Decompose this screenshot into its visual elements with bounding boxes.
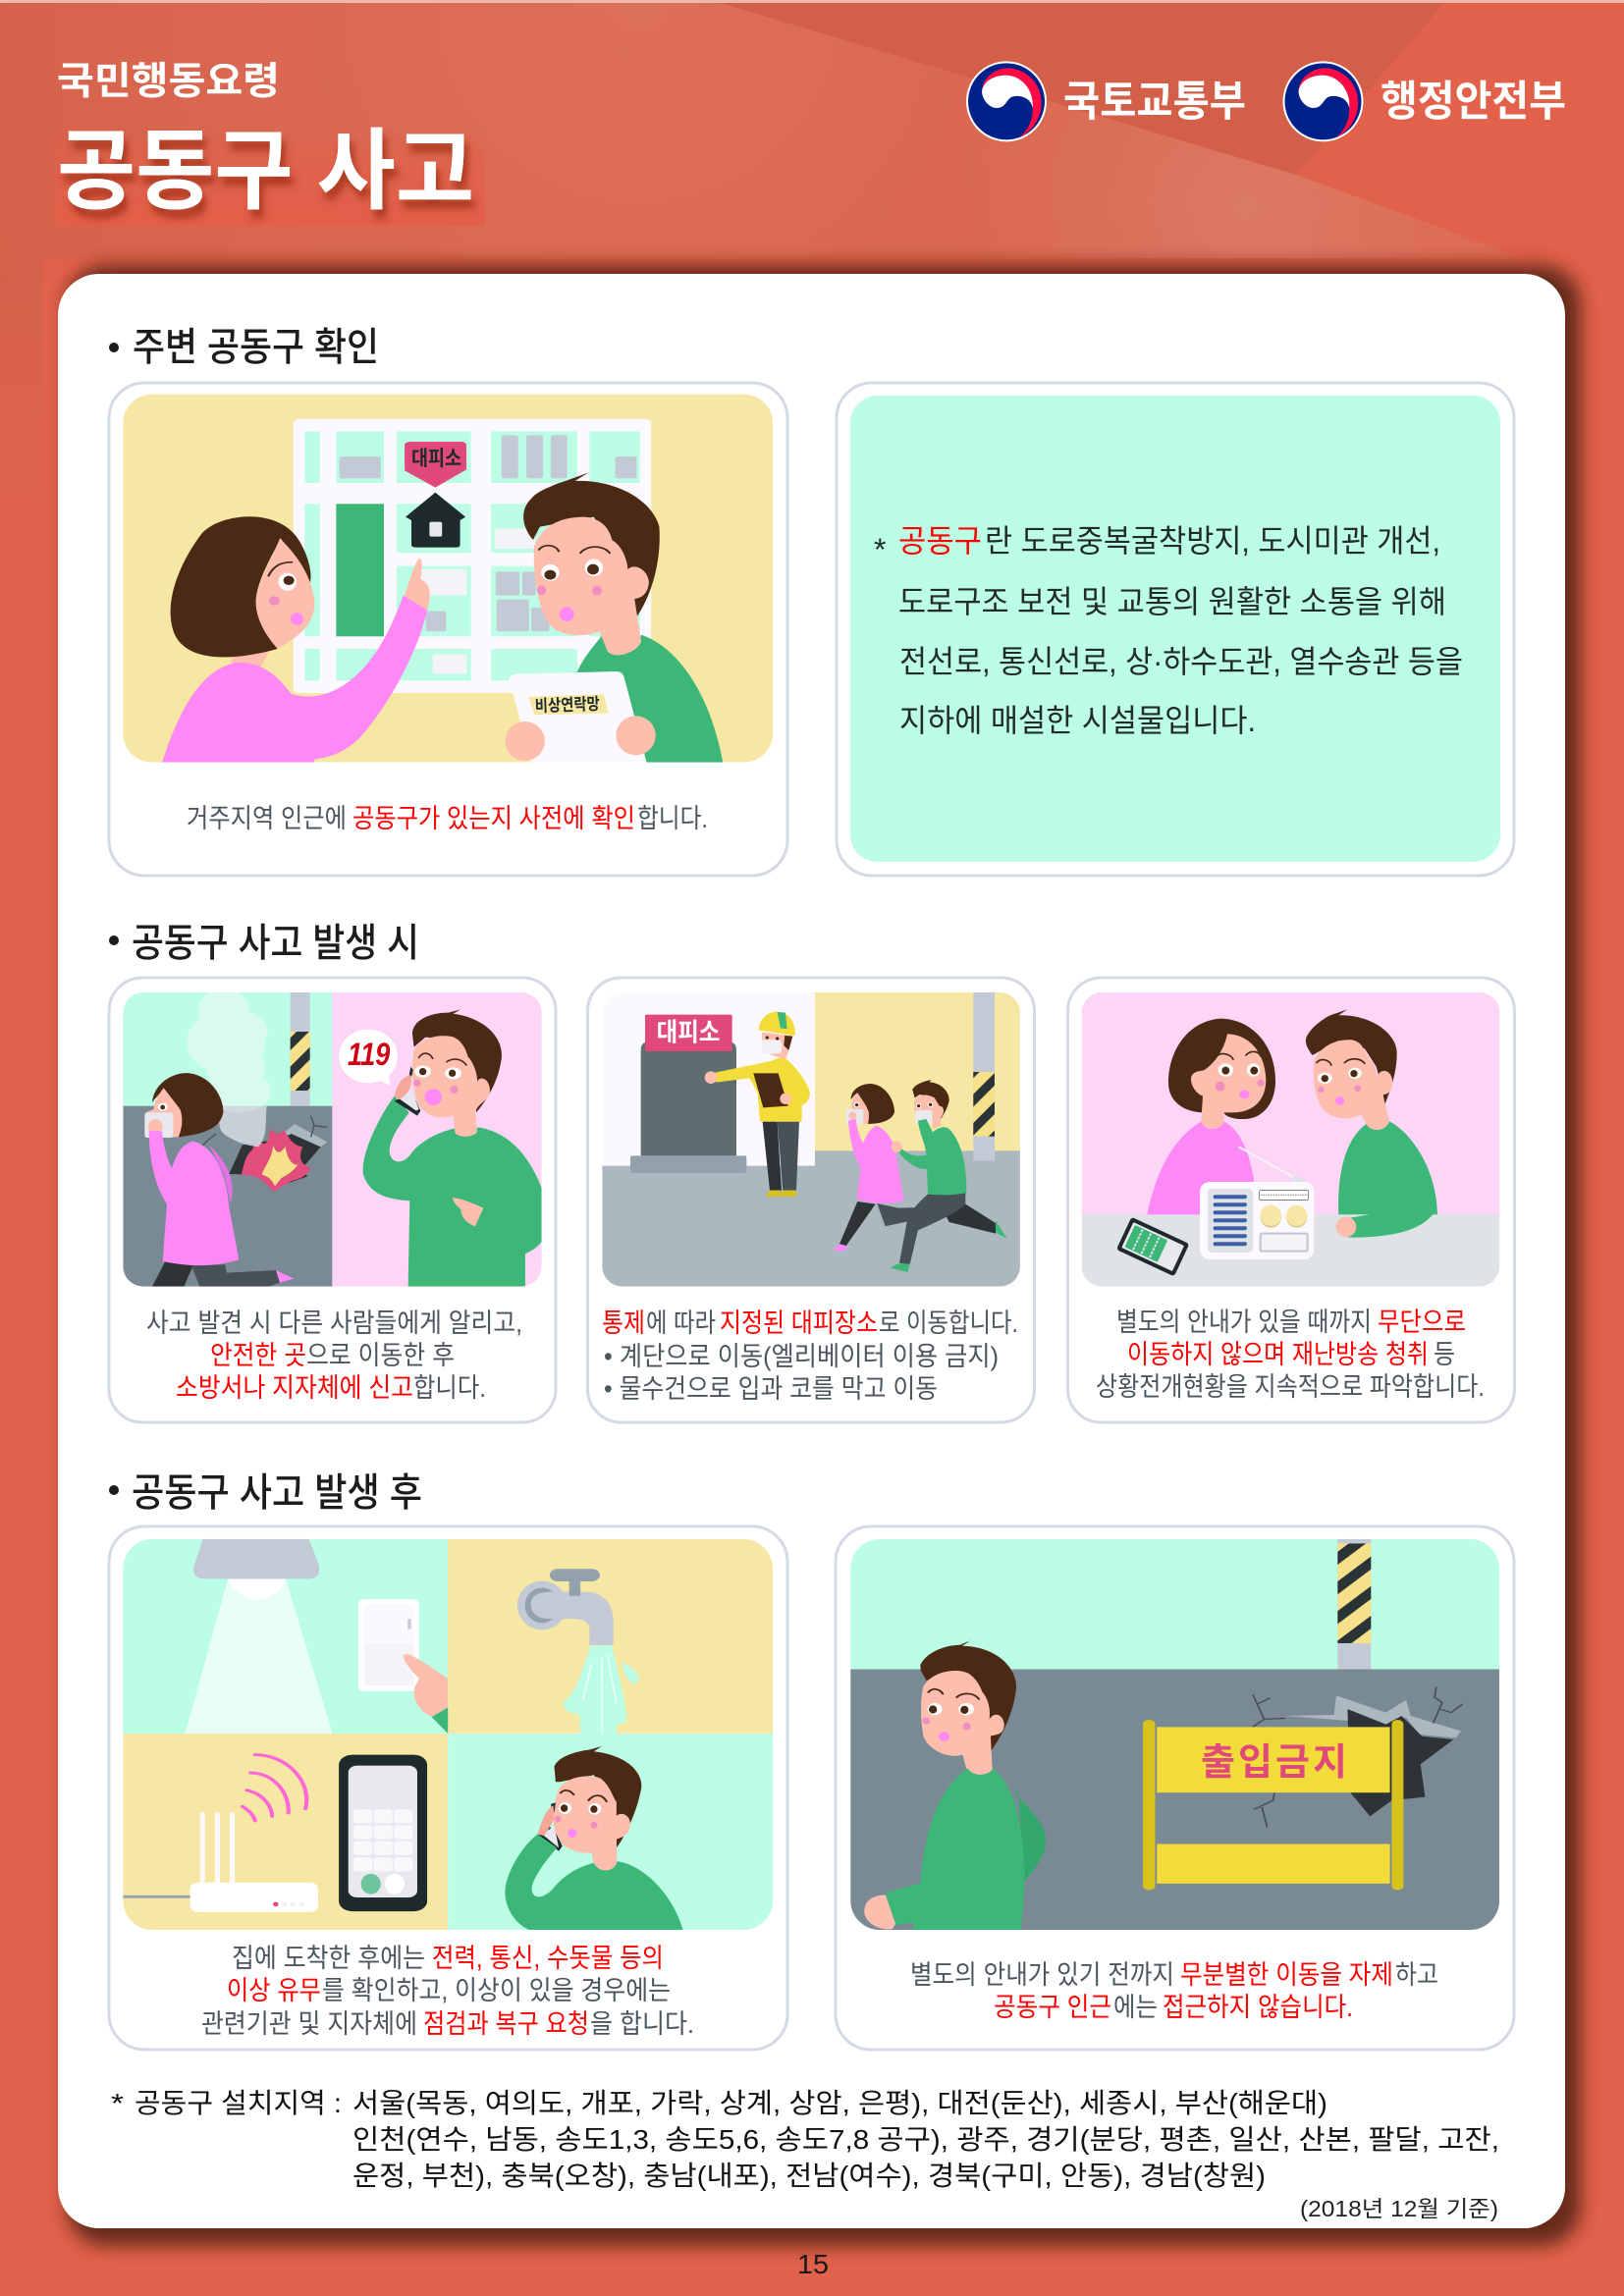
figure: man with contact sheet	[505, 473, 723, 763]
caption	[1096, 1308, 1485, 1402]
caption	[201, 1944, 694, 2039]
caption: 점검과 복구 요청	[423, 2009, 589, 2039]
footnote: installation regions: *	[111, 2088, 124, 2118]
figure: woman pointing	[162, 516, 430, 763]
page number: 15	[797, 2249, 829, 2279]
panel: check nearby utility tunnel	[109, 383, 787, 876]
panel: definition note	[837, 383, 1514, 876]
caption: 하고	[1395, 1960, 1438, 1990]
shelter door and sign	[630, 1015, 746, 1173]
footnote: installation regions	[111, 2088, 1499, 2221]
icon: phone keypad	[339, 1755, 427, 1911]
illustration: no entry barrier	[850, 1539, 1499, 1931]
pillar	[973, 992, 995, 1161]
icon: wifi router	[123, 1755, 318, 1912]
definition text: 지하에 매설한 시설물입니다.	[899, 703, 1256, 738]
main title: 공동구 사고	[57, 123, 474, 221]
definition text: 란 도로중복굴착방지, 도시미관 개선,	[985, 523, 1440, 559]
caption: 무분별한 이동을 자제	[1180, 1960, 1393, 1990]
icon: ceiling lamp	[186, 1539, 333, 1734]
caption: 으로 이동한 후	[306, 1341, 455, 1370]
caption: 별도의 안내가 있기 전까지	[910, 1960, 1174, 1990]
footnote: installation regions: 공동구 설치지역 :	[135, 2088, 342, 2118]
illustration: couple checking map: 비상연락망	[534, 695, 600, 716]
definition text	[874, 523, 1463, 738]
definition text: *	[874, 532, 886, 567]
footnote: installation regions: 운정, 부천), 충북(오창), 충남(내포), 전남(여수), 경북(구미, 안동), 경남(창원)	[352, 2161, 1266, 2191]
panel: listen to broadcast	[1068, 978, 1514, 1422]
panel: check utilities at home	[109, 1526, 787, 2050]
icon: house	[406, 493, 465, 548]
subtitle: 국민행동요령	[57, 61, 280, 103]
caption: 등	[1434, 1340, 1455, 1369]
illustration: four utility checks	[123, 1539, 773, 1931]
figure: running man	[877, 1080, 1007, 1272]
caption: 전력, 통신, 수돗물 등의	[432, 1944, 664, 1973]
illustration: fire and 119 call	[123, 988, 542, 1287]
illustration: couple with radio	[1082, 992, 1499, 1287]
figure: man calling	[363, 1009, 542, 1287]
figure: man	[1306, 1009, 1437, 1238]
logo: Ministry of Interior	[1282, 61, 1566, 141]
logo: Ministry of Land	[966, 61, 1246, 141]
definition text: 도로구조 보전 및 교통의 원활한 소통을 위해	[898, 584, 1446, 619]
heading: section 2: 공동구 사고 발생 시	[132, 922, 419, 965]
caption: 집에 도착한 후에는	[232, 1944, 425, 1973]
caption: 로 이동합니다.	[879, 1308, 1018, 1338]
icon: water tap	[517, 1569, 639, 1734]
caption: 이동하지 않으며 재난방송 청취	[1127, 1340, 1429, 1369]
figure: worker with helmet	[705, 1012, 810, 1197]
panel: move to shelter	[587, 978, 1035, 1422]
main white panel	[58, 274, 1565, 2228]
shelter door and sign: 대피소	[657, 1018, 720, 1047]
caption	[602, 1308, 1018, 1404]
pillar	[291, 992, 310, 1106]
panel: stay away from site	[836, 1526, 1514, 2050]
caption: 사고 발견 시 다른 사람들에게 알리고,	[146, 1308, 522, 1338]
caption: 지정된 대피장소	[720, 1308, 878, 1338]
caption: 공동구 인근	[994, 1993, 1111, 2022]
caption: • 계단으로 이동(엘리베이터 이용 금지)	[604, 1342, 999, 1371]
caption: 무단으로	[1378, 1308, 1466, 1337]
figure: man walking	[864, 1640, 1046, 1931]
caption: 상황전개현황을 지속적으로 파악합니다.	[1096, 1372, 1485, 1402]
panel: report and evacuate	[109, 978, 556, 1422]
caption: • 물수건으로 입과 코를 막고 이동	[604, 1374, 938, 1404]
smoke	[187, 988, 271, 1147]
caption: 통제	[602, 1308, 645, 1338]
caption: 소방서나 지자체에 신고	[176, 1373, 413, 1403]
footnote: installation regions: 서울(목동, 여의도, 개포, 가락, 상계, 상암, 은평), 대전(둔산), 세종시, 부산(해운대)	[352, 2088, 1327, 2118]
pillar	[1337, 1539, 1371, 1670]
caption: 안전한 곳	[210, 1341, 306, 1370]
illustration: couple checking map	[123, 395, 773, 763]
caption: 를 확인하고, 이상이 있을 경우에는	[322, 1976, 671, 2005]
caption: 접근하지 않습니다.	[1163, 1993, 1353, 2022]
ministry logos	[966, 61, 1566, 141]
logo: Ministry of Land: 국토교통부	[1063, 79, 1246, 126]
crater and fire	[199, 1116, 327, 1192]
sign shape	[405, 442, 466, 488]
icon: light switch	[358, 1599, 448, 1734]
caption: 에 따라	[646, 1308, 716, 1338]
definition text: 전선로, 통신선로, 상·하수도관, 열수송관 등을	[899, 644, 1463, 679]
caption: 공동구가 있는지 사전에 확인	[352, 804, 635, 833]
footnote: installation regions: 인천(연수, 남동, 송도1,3, 송도5,6, 송도7,8 공구), 광주, 경기(분당, 평촌, 일산, 산본, 팔달, 고잔,	[352, 2124, 1499, 2155]
reference date: (2018년 12월 기준)	[1300, 2196, 1498, 2221]
collapsed hole	[1253, 1687, 1462, 1828]
map board	[294, 419, 651, 693]
caption: 에는	[1113, 1993, 1158, 2022]
caption: 이상 유무	[227, 1976, 321, 2005]
speech bubble 119	[339, 1030, 398, 1086]
title group	[54, 61, 485, 226]
illustration: evacuation guide	[602, 992, 1020, 1287]
caption	[146, 1308, 522, 1403]
caption: 별도의 안내가 있을 때까지	[1116, 1308, 1372, 1337]
illustration: couple checking map: 대피소	[411, 448, 461, 470]
icon: radio	[1200, 1147, 1314, 1259]
figure: man on phone	[505, 1746, 683, 1931]
caption: 합니다.	[413, 1373, 486, 1403]
illustration: no entry barrier: 출입금지	[1201, 1742, 1347, 1784]
caption: 관련기관 및 지자체에	[201, 2009, 417, 2039]
caption: 합니다.	[637, 804, 708, 833]
figure: woman fleeing	[144, 1073, 294, 1287]
caption: 거주지역 인근에	[187, 804, 347, 833]
heading: section 1: 주변 공동구 확인	[133, 326, 379, 369]
icon: smartphone	[1116, 1217, 1189, 1276]
figure: running woman	[833, 1084, 904, 1251]
speech bubble 119: 119	[348, 1037, 390, 1072]
caption	[910, 1960, 1438, 2022]
caption: 을 합니다.	[590, 2009, 694, 2039]
heading: section 3: 공동구 사고 발생 후	[132, 1471, 422, 1515]
barrier frame	[1143, 1720, 1403, 1890]
figure: woman	[1147, 1019, 1275, 1214]
logo: Ministry of Interior: 행정안전부	[1380, 79, 1566, 126]
definition text: 공동구	[898, 523, 982, 559]
